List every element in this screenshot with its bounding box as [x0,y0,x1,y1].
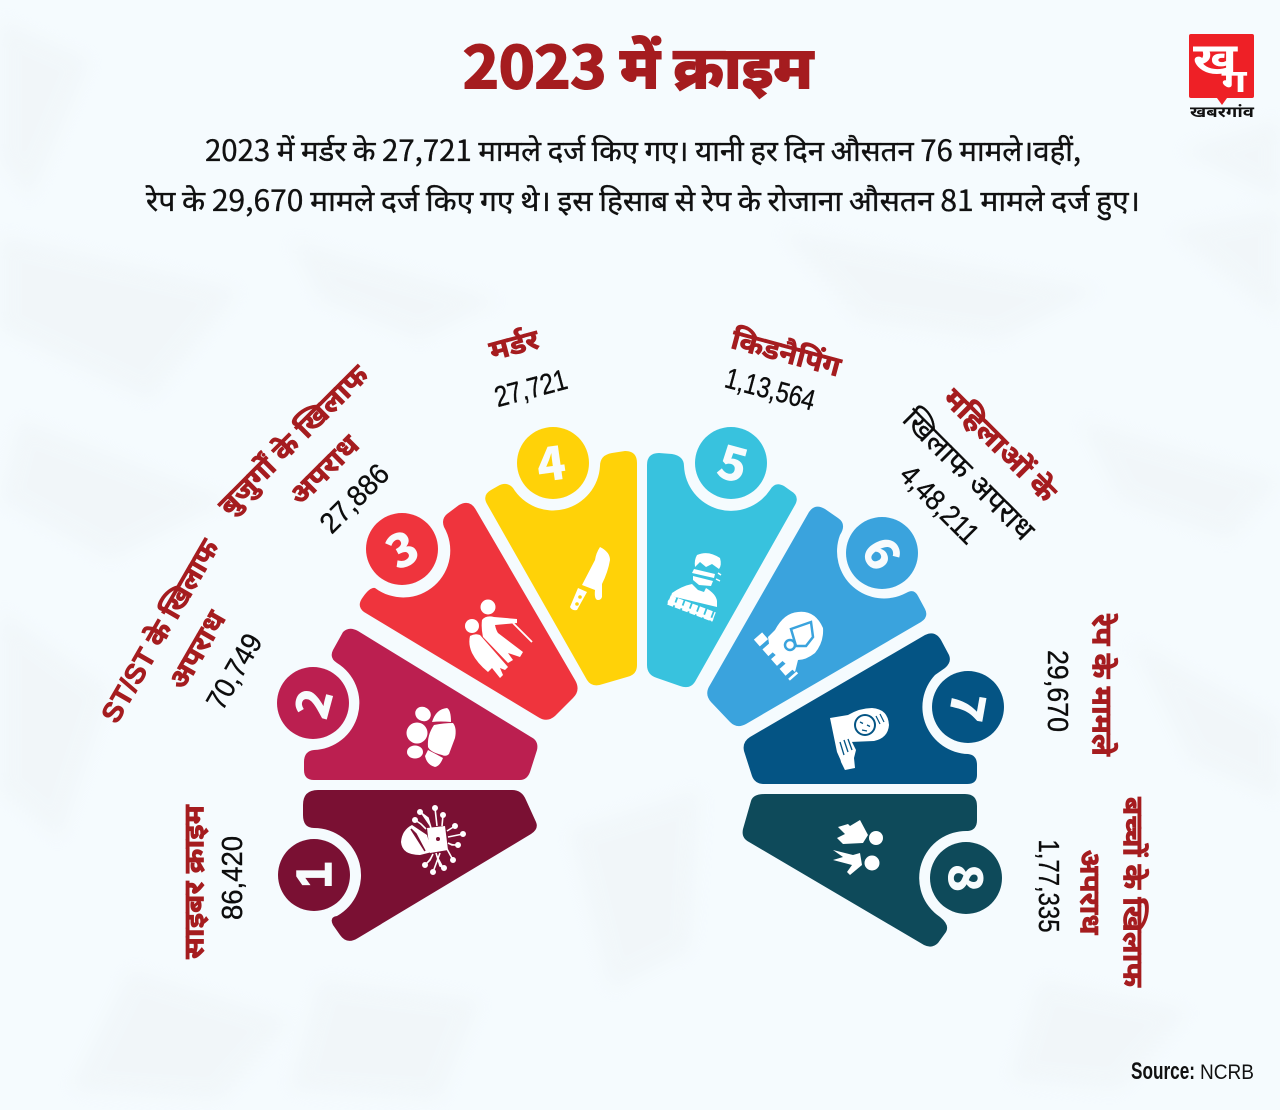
source: Source: [1131,1058,1195,1085]
source: NCRB [1200,1061,1254,1084]
segment 2: crimes against ST/ST [273,629,537,780]
icon: elderly couple [465,600,532,678]
label 3: elderly: बुजुर्गों के खिलाफ [211,357,376,522]
label 3: elderly: 27,886 [314,458,396,540]
label 6: women: महिलाओं के [937,381,1065,508]
logo [1189,34,1255,121]
title: 2023 में क्राइम [463,21,814,105]
label 6: women: 4,48,211 [893,459,985,551]
label 7: rape: 29,670 [1041,650,1073,732]
segment 7: rape cases: 7 [934,687,1007,728]
segment 8: crimes against children: 8 [934,864,1004,892]
segment 8: crimes against children [743,794,1004,947]
label 5: kidnapping: किडनैपिंग [728,323,845,383]
label 4: murder: मर्डर [486,322,543,366]
label 7: rape [1041,613,1120,757]
icon: woman with rope [758,612,823,677]
segment 2: crimes against ST/ST: 2 [273,679,347,725]
intro text: 2023 में मर्डर के 27,721 मामले दर्ज किए गए। यानी हर दिन औसतन 76 मामले।वहीं, [205,128,1081,170]
label 2: ST/ST: ST/ST के खिलाफ [93,532,225,728]
icon: woman and hand [830,708,889,770]
segment 5: kidnapping [647,423,797,687]
logo: खबरगांव [1190,104,1255,121]
label 2: ST/ST: 70,749 [201,628,269,716]
label 5: kidnapping: 1,13,564 [721,363,819,417]
label 1: cyber crime: 86,420 [217,836,249,920]
segment 7: rape cases [744,633,1007,784]
label 1: cyber crime: साइबर क्राइम [178,804,210,959]
segment 4: murder: 4 [532,424,570,496]
logo: ख [1193,35,1239,84]
icon: knife [570,547,610,610]
segment 1: cyber crime: 1 [288,862,340,888]
label 8: children [1032,797,1150,988]
segment 6: crimes against women [707,507,926,726]
icon: computer bug [401,806,465,874]
label 4: murder [486,322,571,414]
label 4: murder: 27,721 [491,364,571,414]
label 1: cyber crime [178,804,249,959]
segment 4: murder [485,424,637,685]
label 3: elderly: अपराध [283,428,366,511]
label 8: children: बच्चों के खिलाफ [1118,797,1150,988]
segment 3: crimes against elderly [360,503,578,720]
label 5: kidnapping [721,323,845,417]
icon: blindfolded man [668,553,721,620]
segment 3: crimes against elderly: 3 [372,509,429,584]
logo: ग [1222,63,1248,99]
label 6: women [893,381,1065,551]
label 6: women: खिलाफ अपराध [896,402,1042,548]
segment 1: cyber crime [278,790,537,941]
label 7: rape: रेप के मामले [1086,613,1120,757]
intro text [145,128,1140,221]
icon: children [833,820,883,875]
icon: paw hands [406,704,456,767]
segment 5: kidnapping: 5 [711,423,757,497]
label 2: ST/ST: अपराध [162,605,232,695]
segment 6: crimes against women: 6 [847,523,922,580]
intro text: रेप के 29,670 मामले दर्ज किए गए थे। इस हिसाब से रेप के रोजाना औसतन 81 मामले दर्ज हुए। [145,178,1140,221]
label 8: children: 1,77,335 [1032,840,1064,932]
label 8: children: अपराध [1074,850,1106,935]
